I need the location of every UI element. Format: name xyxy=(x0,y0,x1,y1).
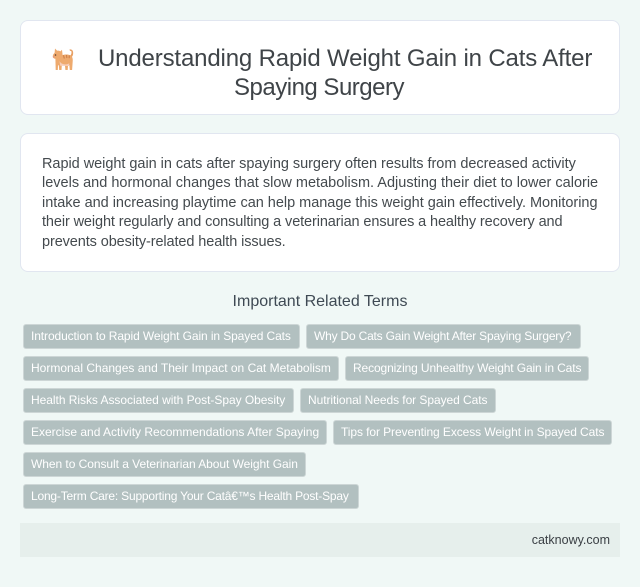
panel: summary text: prevents obesity-related health issues. xyxy=(42,234,286,250)
tag xyxy=(300,388,496,413)
tag xyxy=(306,324,581,349)
tag xyxy=(345,356,589,381)
panel: summary text xyxy=(20,133,620,272)
tag: Long-Term Care: Supporting Your Catâ€™s Health Post-Spay xyxy=(31,489,349,503)
panel: summary text: levels and hormonal changes that slow metabolism. Adjusting their diet to lower calorie xyxy=(42,175,598,191)
tag: Hormonal Changes and Their Impact on Cat Metabolism xyxy=(31,361,331,375)
tag: Introduction to Rapid Weight Gain in Spayed Cats xyxy=(31,329,291,343)
panel: summary text: intake and increasing playtime can help manage this weight gain effectively. Monitoring xyxy=(42,195,598,211)
panel: related term tags xyxy=(23,324,612,509)
tag xyxy=(333,420,612,445)
heading: related terms: Important Related Terms xyxy=(233,293,407,310)
tag xyxy=(23,484,359,509)
tag: Health Risks Associated with Post-Spay Obesity xyxy=(31,393,285,407)
tag xyxy=(23,324,300,349)
tag xyxy=(23,356,339,381)
tag: Exercise and Activity Recommendations After Spaying xyxy=(31,425,319,439)
panel: summary text: their weight regularly and consulting a veterinarian ensures a healthy recovery and xyxy=(42,214,562,230)
tag xyxy=(23,388,294,413)
footer: catknowy.com xyxy=(532,533,610,547)
tag: Nutritional Needs for Spayed Cats xyxy=(308,393,487,407)
tag xyxy=(23,452,306,477)
panel: title card xyxy=(20,20,620,115)
tag: When to Consult a Veterinarian About Weight Gain xyxy=(31,457,298,471)
tag xyxy=(23,420,327,445)
panel: summary text: Rapid weight gain in cats after spaying surgery often results from decreased activity xyxy=(42,156,576,172)
title: Understanding Rapid Weight Gain in Cats After xyxy=(98,45,592,72)
title xyxy=(98,45,592,101)
tag: Why Do Cats Gain Weight After Spaying Surgery? xyxy=(314,329,571,343)
tag: Recognizing Unhealthy Weight Gain in Cats xyxy=(353,361,581,375)
icon: cat xyxy=(52,48,74,70)
footer xyxy=(20,523,620,557)
tag: Tips for Preventing Excess Weight in Spayed Cats xyxy=(341,425,604,439)
title: Spaying Surgery xyxy=(234,74,404,101)
